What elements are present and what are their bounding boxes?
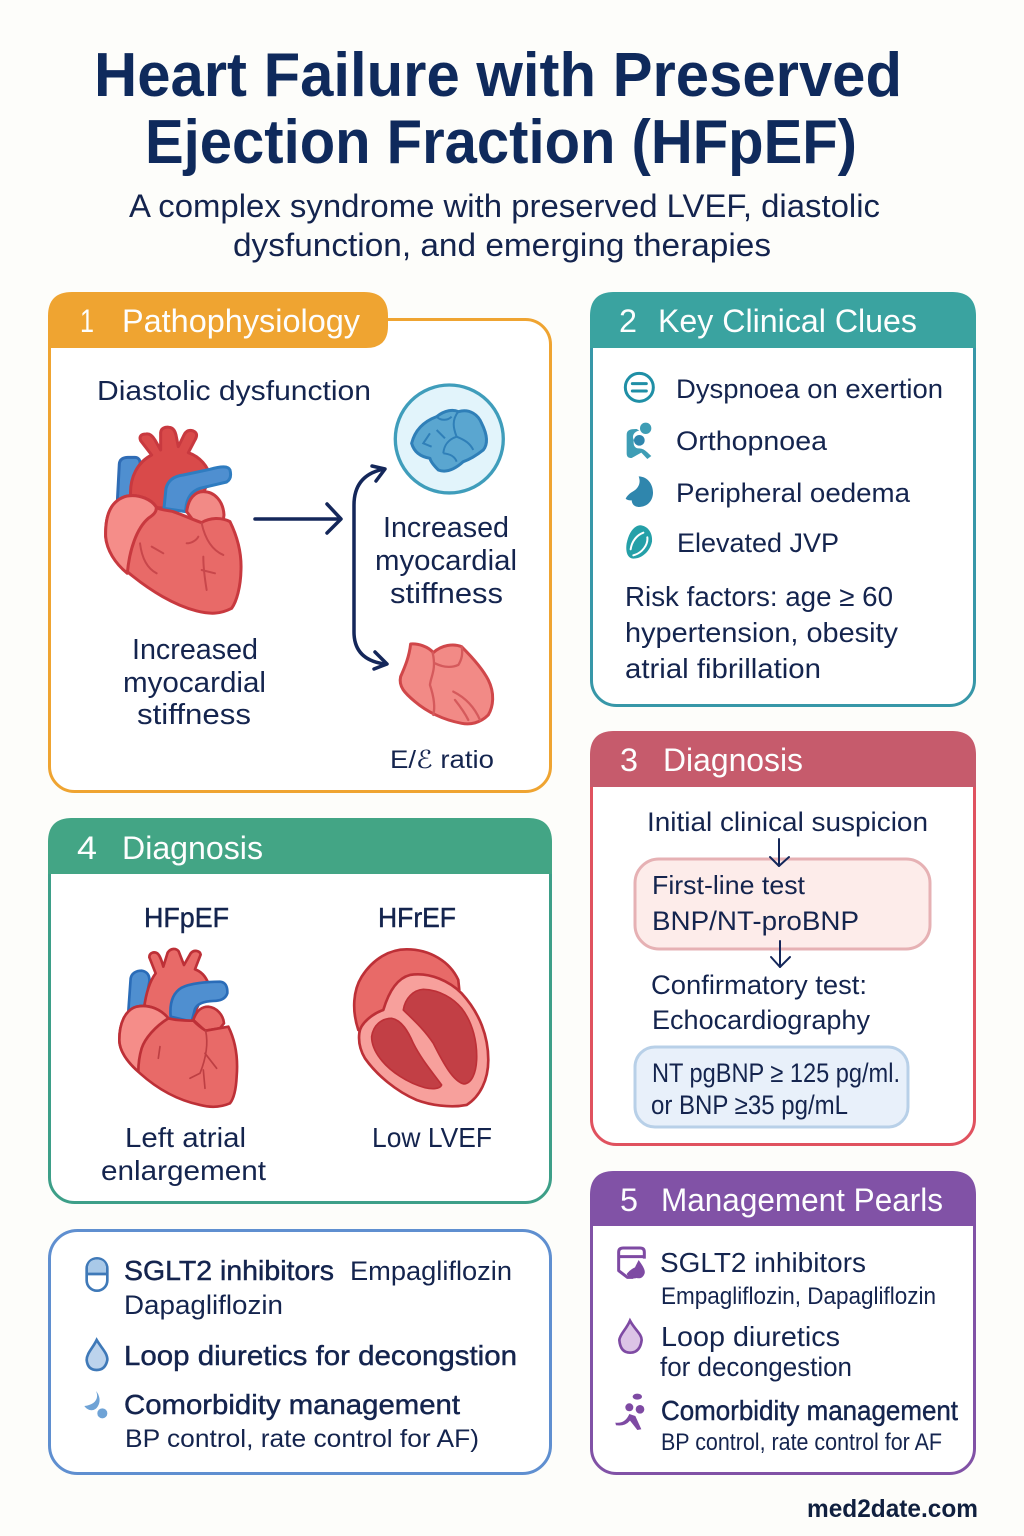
- label: HFrEF: HFrEF: [378, 902, 456, 933]
- heading: management pearls: [590, 1171, 976, 1226]
- text: peripheral oedema: Peripheral oedema: [676, 478, 911, 508]
- label: increased myocardial stiffness, left: stiffness: [137, 699, 251, 731]
- heading: pathophysiology: Pathophysiology: [122, 303, 360, 339]
- text: loop diuretics for decongestion: Loop diuretics: [661, 1321, 840, 1352]
- label: E/e ratio: E/ℰ ratio: [390, 746, 494, 774]
- text: SGLT2 inhibitors, drugs: [660, 1247, 936, 1310]
- icon: orthopnoea: [627, 423, 651, 459]
- text: risk factors: atrial fibrillation: [625, 653, 821, 684]
- text: SGLT2 inhibitors: Dapagliflozin: [124, 1290, 283, 1320]
- text: initial clinical suspicion: Initial clinical suspicion: [647, 807, 928, 837]
- panel: HFpEF vs HFrEF diagnosis: [48, 818, 552, 1202]
- text: comorbidity management: Comorbidity management: [124, 1389, 460, 1420]
- title: Heart Failure with Preserved: [94, 41, 902, 110]
- box: first-line test: First-line test: [652, 870, 806, 900]
- heading: pathophysiology: 1: [80, 303, 94, 339]
- icon: comorbidity: [84, 1391, 107, 1418]
- panel: diagnosis pathway: [590, 731, 976, 1144]
- heading: diagnosis 3: 3: [620, 742, 638, 778]
- box: first-line test: [635, 859, 930, 949]
- text: loop diuretics: Loop diuretics for decongstion: [124, 1340, 517, 1371]
- arrow: first-line to confirmatory: [771, 941, 790, 967]
- box: thresholds: NT pgBNP ≥ 125 pg/ml.: [652, 1058, 900, 1088]
- heading: diagnosis 4: Diagnosis: [122, 830, 263, 866]
- heading: pathophysiology: [48, 292, 388, 348]
- text: risk factors: hypertension, obesity: [625, 617, 898, 648]
- label: increased myocardial stiffness, left: [123, 634, 266, 731]
- text: loop diuretics for decongestion: [660, 1321, 852, 1382]
- brand: med2date.com: med2date.com: [807, 1495, 978, 1523]
- subtitle: dysfunction, and emerging therapies: [233, 227, 771, 263]
- title: Ejection Fraction (HFpEF): [145, 108, 857, 177]
- label: diastolic dysfunction: Diastolic dysfunction: [97, 375, 371, 406]
- panel: key clinical clues: [590, 292, 976, 706]
- text: orthopnoea: Orthopnoea: [676, 426, 828, 456]
- heading: key clinical clues: 2: [619, 303, 637, 339]
- icon: document with apple: [619, 1248, 645, 1278]
- heading: diagnosis 3: Diagnosis: [663, 742, 803, 778]
- text: comorbidity management: [124, 1389, 479, 1453]
- text: elevated JVP: Elevated JVP: [677, 528, 839, 558]
- text: risk factors: Risk factors: age ≥ 60: [625, 581, 893, 612]
- text: SGLT2 inhibitors: Empagliflozin: [350, 1256, 512, 1286]
- icon: stiff myocardium circle: [395, 385, 503, 493]
- icon: purple drop: [619, 1321, 642, 1353]
- arrow: branching bracket: [354, 466, 387, 669]
- text: comorbidity management: BP control, rate control for AF): [125, 1425, 479, 1453]
- heading: diagnosis 4: [48, 818, 552, 874]
- title: [94, 41, 902, 177]
- panel: pathophysiology: [48, 292, 550, 792]
- label: increased myocardial stiffness, right: myocardial: [375, 545, 517, 577]
- label: left atrial enlargement: enlargement: [101, 1155, 266, 1186]
- icon: dyspnoea: [625, 373, 653, 401]
- arrow: suspicion to first-line: [770, 839, 789, 866]
- text: confirmatory test: [651, 970, 870, 1035]
- text: SGLT2 inhibitors: [124, 1255, 512, 1320]
- label: increased myocardial stiffness, left: Increased: [132, 634, 258, 666]
- icon: HFpEF heart: [119, 949, 237, 1107]
- text: SGLT2 inhibitors, drugs: SGLT2 inhibitors: [660, 1247, 866, 1278]
- heading: key clinical clues: [590, 292, 976, 348]
- box: thresholds: [635, 1047, 908, 1127]
- icon: JVP: [626, 525, 652, 559]
- label: low LVEF: Low LVEF: [372, 1122, 492, 1153]
- icon: pill: [87, 1258, 107, 1291]
- icon: oedema: [626, 476, 653, 507]
- text: risk factors: [625, 581, 898, 684]
- icon: heart anatomy: [106, 427, 241, 613]
- heading: diagnosis 3: [590, 731, 976, 787]
- box: first-line test: BNP/NT-proBNP: [652, 906, 859, 936]
- text: confirmatory test: Echocardiography: [652, 1005, 870, 1035]
- text: confirmatory test: Confirmatory test:: [651, 970, 867, 1000]
- text: loop diuretics for decongestion: for decongestion: [660, 1352, 852, 1382]
- heading: management pearls: 5: [620, 1182, 638, 1218]
- icon: HFrEF heart section: [354, 949, 488, 1106]
- label: increased myocardial stiffness, right: [375, 512, 517, 610]
- label: increased myocardial stiffness, left: myocardial: [123, 667, 266, 699]
- label: left atrial enlargement: Left atrial: [125, 1122, 246, 1153]
- label: increased myocardial stiffness, right: Increased: [383, 512, 509, 544]
- text: comorbidity management, control: BP control, rate control for AF: [661, 1429, 942, 1456]
- text: dyspnoea on exertion: Dyspnoea on exertion: [676, 374, 943, 404]
- panel: management pearls: [590, 1171, 976, 1474]
- text: SGLT2 inhibitors: SGLT2 inhibitors: [124, 1255, 334, 1286]
- label: left atrial enlargement: [101, 1122, 266, 1186]
- icon: drop: [87, 1340, 107, 1370]
- label: increased myocardial stiffness, right: stiffness: [390, 578, 503, 610]
- panel: treatments list: [50, 1230, 550, 1474]
- heading: management pearls: Management Pearls: [661, 1182, 943, 1218]
- icon: small stiff heart: [400, 644, 493, 724]
- heading: diagnosis 4: 4: [77, 830, 97, 866]
- icon: runner: [615, 1394, 644, 1430]
- box: thresholds: or BNP ≥35 pg/mL: [651, 1090, 848, 1120]
- heading: key clinical clues: Key Clinical Clues: [658, 303, 917, 339]
- text: comorbidity management, control: [661, 1395, 958, 1456]
- arrow: to outcomes: [255, 504, 341, 533]
- text: SGLT2 inhibitors, drugs: Empagliflozin, Dapagliflozin: [661, 1283, 936, 1310]
- text: comorbidity management, control: Comorbidity management: [661, 1395, 958, 1426]
- subtitle: A complex syndrome with preserved LVEF, diastolic: [129, 188, 880, 224]
- subtitle: [129, 188, 880, 263]
- label: HFpEF: HFpEF: [144, 902, 229, 933]
